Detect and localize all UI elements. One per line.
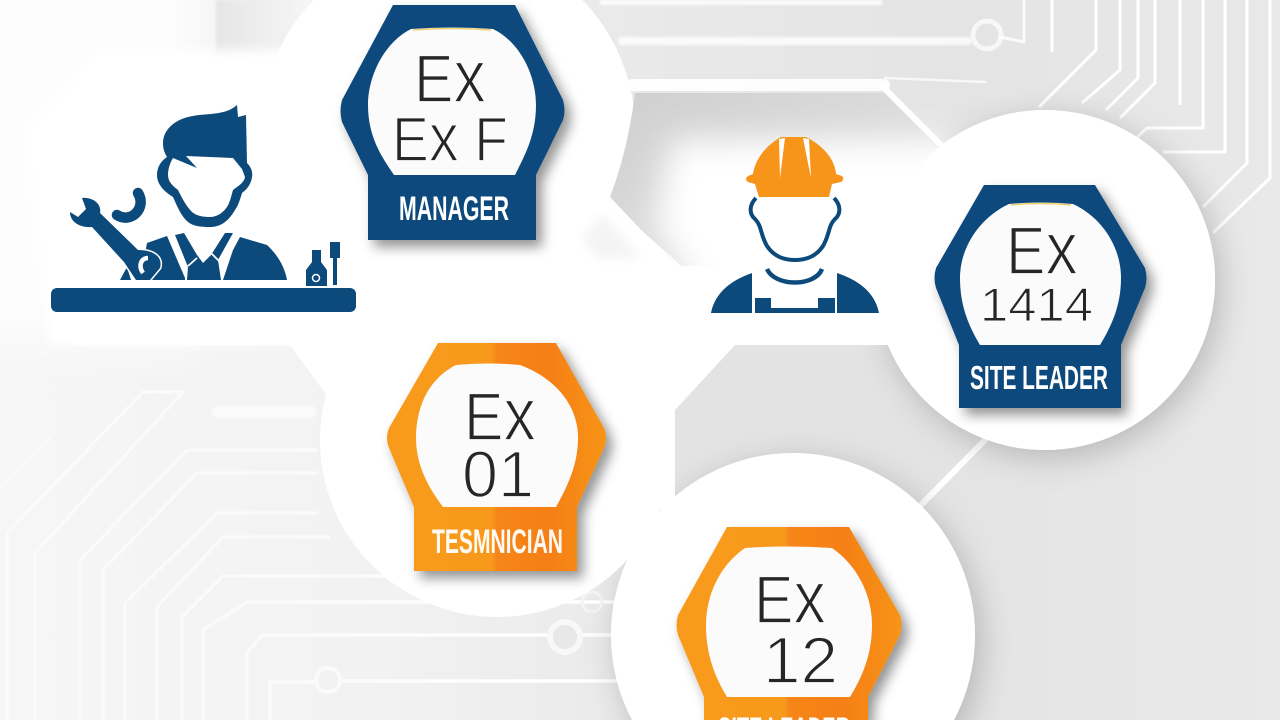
Ex mark: Ex (464, 372, 536, 456)
background: upper left light zone (0, 0, 200, 340)
wrench hook (117, 193, 141, 218)
Ex F mark: Ex F (392, 99, 508, 176)
badge window (706, 546, 872, 697)
white circle: technician (320, 263, 674, 617)
badge window (368, 28, 536, 175)
band: horizontal trace above worker (632, 79, 884, 91)
code 12: 12 (763, 623, 838, 697)
icon: worker with hard hat (711, 137, 879, 313)
background: white glow behind worker (655, 140, 960, 320)
background: faint grey wedge below connector (582, 214, 640, 258)
background: circuit traces lower left (0, 392, 640, 720)
Ex mark: Ex (1006, 206, 1078, 290)
badge: site leader (934, 185, 1146, 408)
badge window (960, 202, 1121, 345)
label: MANAGER (399, 190, 509, 228)
label: TESMNICIAN (432, 523, 563, 561)
background: white blob behind engineer (25, 50, 330, 345)
Ex mark: Ex (414, 34, 486, 118)
badge: manager (340, 5, 564, 240)
shadow circle: lower badge (611, 453, 975, 720)
collar and vest (175, 233, 233, 280)
white circle: site leader (875, 110, 1215, 450)
hat ridges (779, 138, 811, 178)
background: grey fade top left of manager (216, 0, 310, 100)
connector line: site leader to lower badge (920, 440, 985, 506)
white circle: lower badge (612, 454, 974, 720)
collar separators (188, 253, 219, 266)
torso right (223, 237, 287, 280)
wrench jaw opening (141, 258, 148, 273)
badge: lower site leader (676, 527, 902, 720)
code 1414: 1414 (980, 278, 1093, 331)
small wrench end (120, 267, 131, 280)
connector line: manager to worker (603, 200, 677, 266)
Ex mark: Ex (754, 555, 826, 639)
wrench (70, 198, 161, 280)
shadow circle: site leader (875, 110, 1215, 450)
badge: technician (387, 343, 606, 571)
desk (51, 288, 356, 312)
face outline (751, 198, 839, 260)
background: grey zone behind worker (610, 93, 940, 268)
icon: engineer with wrench at desk (51, 105, 356, 312)
badge window (416, 364, 578, 507)
engineer head and hair (157, 105, 252, 227)
background: white under worker (677, 266, 900, 345)
top highlight (413, 28, 491, 30)
connector (330, 242, 340, 285)
torso left (140, 236, 185, 280)
bottle (306, 250, 327, 286)
hard hat (746, 137, 843, 197)
white circle: manager (261, 0, 635, 317)
top highlight (1011, 204, 1071, 205)
shoulders and overalls (711, 273, 879, 313)
collar (767, 269, 822, 282)
code 01: 01 (462, 437, 534, 511)
background: circuit traces upper right (600, 0, 1270, 233)
background: central grey panel (675, 345, 985, 520)
background: white band joining icons (70, 90, 760, 510)
connector line: worker to site leader (884, 88, 942, 146)
label: SITE LEADER (970, 359, 1108, 396)
